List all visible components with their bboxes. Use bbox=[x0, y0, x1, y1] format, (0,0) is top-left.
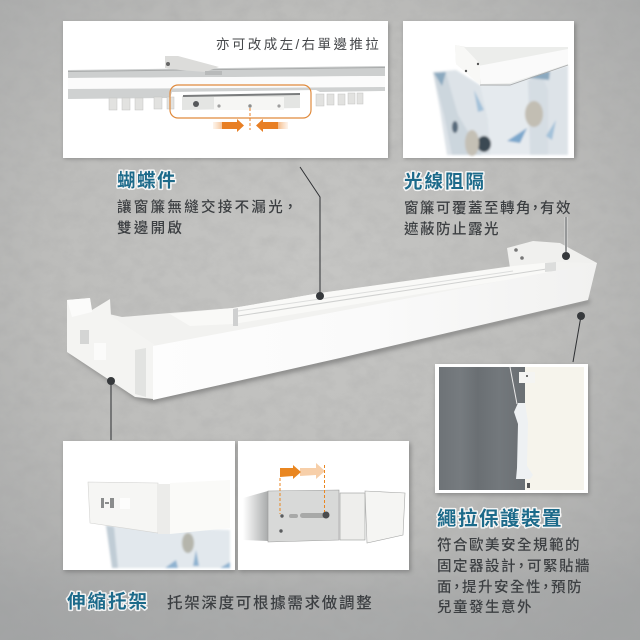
panel: cord safety photo bbox=[435, 364, 589, 495]
orange highlight box bbox=[170, 85, 311, 118]
text: cord safety description bbox=[437, 536, 591, 616]
text: butterfly connector description bbox=[117, 198, 300, 237]
curtain with leaf pattern bbox=[433, 65, 568, 156]
top of the valance with rails bbox=[91, 262, 597, 347]
text: light blocking description: 遮蔽防止露光 bbox=[404, 221, 500, 238]
panel: butterfly connector photo bbox=[63, 21, 389, 159]
panel: bracket depth adjustment photo bbox=[238, 441, 411, 572]
track shadow bbox=[70, 299, 590, 403]
curtain track product bbox=[67, 241, 597, 403]
heading: cord safety device: 繩拉保護裝置 bbox=[437, 507, 563, 530]
panel: corner light blocking photo bbox=[403, 21, 576, 159]
heading: light blocking: 光線阻隔 bbox=[404, 171, 486, 192]
slide arrow bbox=[280, 463, 325, 514]
text: cord safety description: 面，提升安全性，預防 bbox=[437, 578, 583, 596]
wall shadow bbox=[243, 491, 268, 541]
rear right bracket bbox=[507, 241, 597, 275]
callout: light blocking pointer bbox=[562, 217, 570, 260]
panel: bracket front photo bbox=[63, 441, 236, 572]
cream wall bbox=[525, 367, 584, 490]
bracket and valance bbox=[455, 45, 568, 85]
text: extendable bracket description: 托架深度可根據需求做調整 bbox=[167, 594, 373, 612]
text: light blocking description: 窗簾可覆蓋至轉角，有效 bbox=[404, 199, 572, 217]
text: butterfly connector description: 讓窗簾無縫交接不漏光， bbox=[117, 198, 300, 216]
left end bracket bbox=[67, 298, 155, 399]
valance end bbox=[170, 480, 230, 534]
front face of the valance bbox=[153, 263, 597, 400]
text: light blocking description bbox=[404, 199, 572, 238]
rail with hooks bbox=[68, 56, 385, 110]
callout: butterfly connector pointer bbox=[300, 167, 324, 300]
callout: extendable bracket pointer bbox=[107, 377, 115, 440]
text: cord safety description: 固定器設計，可緊貼牆 bbox=[437, 557, 591, 575]
dark curtain bbox=[439, 367, 525, 490]
text: butterfly connector description: 雙邊開啟 bbox=[117, 220, 184, 237]
text: cord safety description: 符合歐美安全規範的 bbox=[437, 536, 581, 554]
heading: extendable bracket: 伸縮托架 bbox=[67, 591, 149, 612]
bracket plate bbox=[88, 482, 170, 534]
curtain under the bracket bbox=[106, 525, 230, 568]
callout: cord safety pointer bbox=[573, 312, 585, 362]
cord safety device bbox=[510, 367, 535, 488]
push arrows bbox=[213, 108, 288, 132]
text: cord safety description: 兒童發生意外 bbox=[437, 598, 533, 616]
adjustable bracket bbox=[268, 490, 405, 543]
butterfly connector piece bbox=[182, 93, 300, 110]
heading: butterfly connector: 蝴蝶件 bbox=[117, 170, 177, 191]
caption: convert to single side: 亦可改成左/右單邊推拉 bbox=[216, 37, 381, 52]
